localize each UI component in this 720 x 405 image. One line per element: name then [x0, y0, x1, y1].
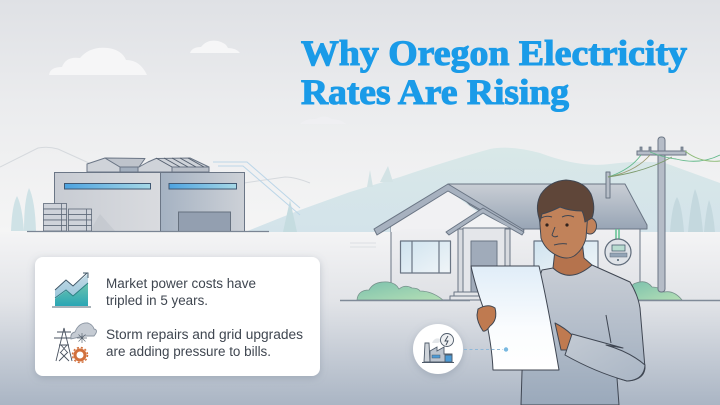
dashed leader line: [464, 348, 503, 350]
server racks: [44, 204, 92, 231]
front door: [471, 241, 497, 300]
right hand: [555, 323, 572, 350]
text: storm repairs: Storm repairs and grid upgrades: [106, 327, 303, 342]
neck: [553, 240, 592, 275]
hair: [537, 180, 594, 222]
head: [539, 199, 588, 258]
title: Why Oregon Electricity: [301, 33, 687, 73]
house: [374, 172, 647, 300]
teal hills behind house: [245, 148, 720, 232]
background sky: [0, 0, 720, 233]
title: Rates Are Rising: [301, 72, 569, 112]
left hand: [477, 306, 496, 331]
electric meter: [605, 229, 631, 265]
distant mountain outline: [0, 147, 310, 183]
sleeve: [565, 334, 645, 381]
text: market power costs: Market power costs have: [106, 276, 256, 291]
loading door: [178, 212, 230, 232]
text: storm repairs: [106, 327, 303, 359]
factory icon circle: [413, 324, 508, 374]
house left window: [400, 241, 450, 273]
bushes: [357, 282, 682, 300]
clouds: [49, 41, 346, 124]
icon: rising chart: [52, 273, 91, 307]
ear: [584, 218, 596, 234]
text: storm repairs: are adding pressure to bills.: [106, 344, 271, 359]
title: [301, 33, 687, 112]
torso: [521, 265, 645, 405]
text: market power costs: tripled in 5 years.: [106, 293, 208, 308]
bill paper: [471, 266, 559, 370]
person reading a bill: [471, 180, 645, 405]
face details: [541, 216, 574, 245]
wires: [608, 151, 720, 177]
text: market power costs: [106, 276, 256, 308]
data lines from building: [213, 162, 376, 247]
utility pole and wires: [608, 137, 720, 292]
ground: [0, 232, 720, 405]
porch steps: [450, 292, 486, 300]
info card: [35, 257, 320, 376]
chimney pipe: [606, 172, 610, 198]
icon: storm and grid: [54, 323, 96, 362]
data center building: [27, 158, 269, 232]
roof structures: [87, 158, 209, 172]
building windows: [64, 184, 150, 189]
left trees: [11, 188, 36, 231]
house right window: [534, 241, 598, 273]
